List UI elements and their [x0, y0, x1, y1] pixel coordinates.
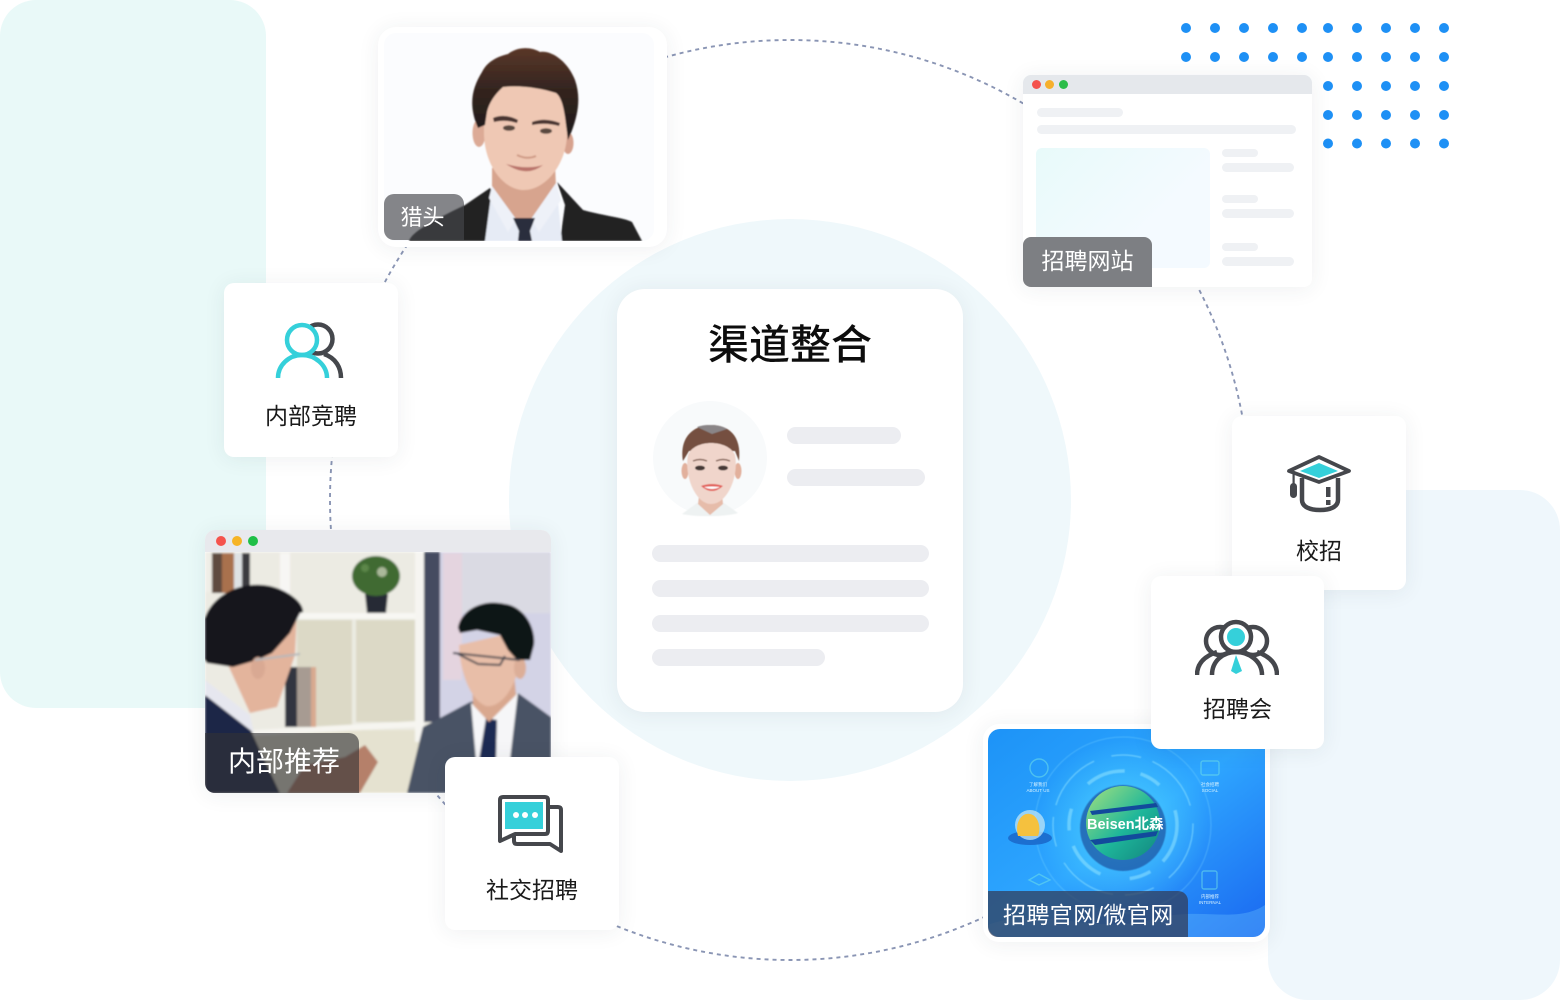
panel: internal referral video window [205, 530, 551, 793]
panel: campus recruiting card [1232, 416, 1406, 590]
skeleton lines: body [652, 545, 929, 666]
tag: 招聘网站 [1023, 237, 1152, 287]
panel: social recruiting card [445, 757, 619, 930]
screenshot: Beisen careers site [988, 729, 1265, 937]
icon: chat bubbles [498, 795, 563, 853]
tag: 内部推荐: 内部推荐 [228, 746, 340, 777]
tag: 猎头 [384, 194, 464, 240]
screenshot: Beisen careers site: INTERNAL [1199, 900, 1222, 905]
tag: 内部推荐 [205, 733, 359, 793]
icon: graduation cap [1287, 455, 1351, 512]
icon: group of people [1195, 620, 1279, 675]
logo text: Beisen北森 [1087, 815, 1164, 833]
skeleton lines: name [787, 427, 925, 486]
window title bar [205, 530, 551, 552]
panel: official site card [983, 724, 1270, 942]
background panel: right pale blue [1268, 490, 1560, 1000]
photo: man in suit [408, 46, 643, 241]
panel: headhunter photo card [378, 27, 667, 247]
panel: job fair card [1151, 576, 1324, 749]
label: 社交招聘: 社交招聘 [486, 877, 578, 903]
photo: two men in office [205, 552, 551, 793]
tag: 招聘官网/微官网 [988, 891, 1188, 937]
label: 校招: 校招 [1296, 538, 1342, 564]
label: 内部竞聘: 内部竞聘 [265, 403, 357, 429]
panel: internal competition card [224, 283, 398, 457]
central pale circle [509, 219, 1071, 781]
dot grid decoration [1181, 23, 1449, 148]
screenshot: Beisen careers site: 了解我们 [1029, 781, 1047, 788]
tag: 招聘网站: 招聘网站 [1042, 248, 1134, 274]
browser title bar [1023, 75, 1312, 94]
tag: 猎头: 猎头 [400, 205, 444, 230]
label: 招聘会: 招聘会 [1203, 696, 1272, 722]
title: 渠道整合 [708, 322, 872, 368]
page skeleton lines [1036, 108, 1296, 268]
screenshot: Beisen careers site: 社会招聘 [1201, 781, 1219, 788]
panel: center resume card [617, 289, 963, 712]
icon: two people [276, 322, 344, 378]
screenshot: Beisen careers site: SOCIAL [1202, 788, 1219, 793]
panel: recruitment website browser card [1023, 75, 1312, 287]
background panel: left mint [0, 0, 266, 708]
avatar: woman portrait [680, 424, 742, 516]
screenshot: Beisen careers site: ABOUT US [1027, 788, 1049, 793]
tag: 招聘官网/微官网: 招聘官网/微官网 [1003, 902, 1174, 928]
screenshot: Beisen careers site: 内部推荐 [1201, 893, 1219, 900]
